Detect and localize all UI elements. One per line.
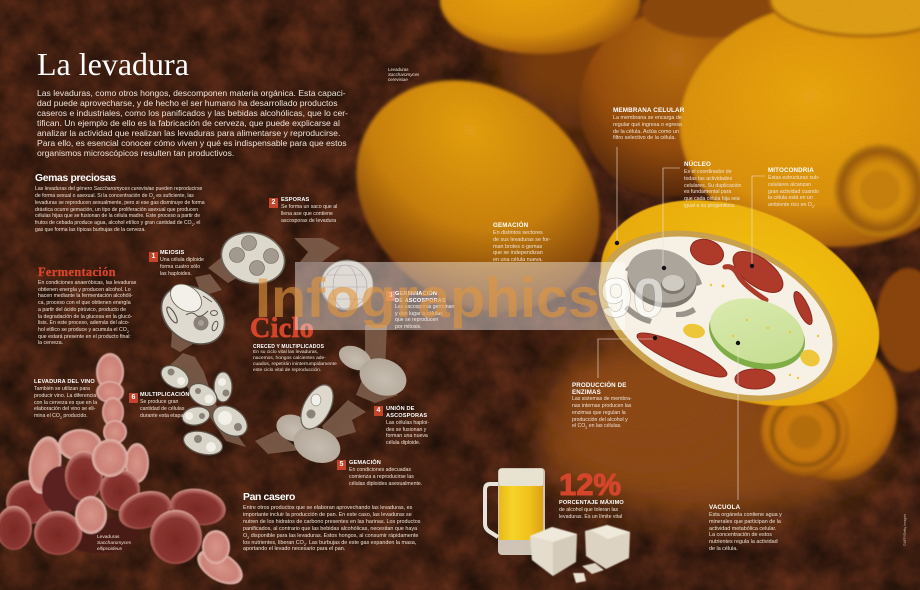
step 4 text: célula diploide. [386,440,420,446]
text: Fermentación: que estará presente en el producto final: [38,334,131,340]
text: Gemas preciosas: Las levaduras del género Saccharomyces cerevisiae pueden reproducirse [35,186,202,192]
cycle arrows [170,238,398,454]
label: Gemación: en una célula nueva. [493,257,543,263]
heading: Gemas preciosas: Gemas preciosas [35,173,116,184]
stat: 12%: 12% [559,467,621,502]
step 2 number: 2 [272,199,275,206]
label: Vacuola: nutrientes regula la actividad [709,539,778,545]
text: Levadura del vino: elaboración del vino se eli- [34,406,95,412]
step 2 text: Se forma un saco que al [281,204,337,210]
intro text: caseros e industriales, como los panificados y las bebidas alcohólicas, que lo cer- [37,108,348,118]
nucleus [621,242,703,324]
label: Producción de enzimas: producción del alcohol y [572,417,628,423]
step 2 text: ascosporas de levadura [281,218,336,224]
step 6 text: Se produce gran [140,399,178,405]
step 4 text: des se fusionan y [386,427,426,433]
text: Fermentación: ca, proceso con el que obtienen energía [38,300,131,306]
text: Gemas preciosas: de forma sexual o asexual. Si la concentración de O2 es suficiente, las [35,193,194,200]
heading: Pan casero: Pan casero [243,492,295,503]
caption: ellipsoideus: Levaduras [97,535,119,540]
label: Producción de enzimas: el CO2 en las células. [572,423,622,430]
photo: wine yeast Saccharomyces ellipsoideus [0,353,249,590]
step 3 text: Las ascosporas germinan [395,304,454,310]
step 6 text: cantidad de células [140,406,184,412]
outer yellow cell wall [569,160,911,446]
text: Pan casero: aportando el levado necesario para el pan. [243,546,345,552]
label: Producción de enzimas: enzimas que regulan la [572,410,626,416]
cells: step 6 multiplication [157,361,253,459]
label: Membrana celular: filtro selectivo de la célula. [613,135,676,141]
label: Mitocondria: la célula está en un [768,195,813,201]
label: Vacuola: minerales que participan de la [709,519,781,525]
step 4 text: Las células haploi- [386,420,429,426]
text: Pan casero: Entre otros productos que se elaboran aprovechando las levaduras, es [243,505,412,511]
caption: ellipsoideus [97,534,131,552]
cell: step 3 ascospores [321,260,373,310]
step 1 text: forma cuatro sólo [160,264,200,270]
step 4 text: ASCOSPORAS [386,413,427,419]
text: Levadura del vino: mina el CO2 producido. [34,413,88,420]
label: Gemación: que se independizan [493,250,543,256]
step 4 number: 4 [377,407,380,414]
label: Núcleo: celulares. Su duplicación [684,183,741,189]
label: Vacuola: actividad metabólica celular. [709,526,776,532]
text: Pan casero: nutren de los hidratos de carbono presentes en las harinas. Los productos [243,519,420,525]
caption: cerevisiae [388,67,420,82]
label: Núcleo [684,160,742,209]
cytoplasm [582,206,856,426]
text: Pan casero [243,505,420,552]
label: Membrana celular: La membrana se encarga de [613,115,682,121]
caption: cerevisiae: Levaduras [388,67,409,72]
text: Gemas preciosas: frutos de cebada produce agua, alcohol etílico y gran cantidad de CO2, el [35,220,200,227]
step 5 text: En condiciones adecuadas [349,467,411,473]
step 6 number [129,393,138,403]
intro text: Las levaduras, como otros hongos, descomponen materia orgánica. Esta capaci- [37,88,346,98]
watermark band [295,262,625,330]
text: Fermentación: la cerveza. [38,340,63,346]
caption: cerevisiae: cerevisiae [388,77,408,82]
label: Núcleo: Es el coordinador de [684,169,732,175]
watermark globe outline [323,265,367,309]
step 2 text: llena ase que contiene [281,211,333,217]
text: Gemas preciosas: levaduras se reproducen sexualmente, pero si ese gas disminuye de forma [35,200,205,206]
step 3 number [386,291,395,301]
caption: ellipsoideus: Saccharomyces [97,541,131,546]
text: Levadura del vino: con la cerveza es que en la [34,400,97,406]
label: Gemación [493,221,551,263]
intro text: analizar la actividad que realizan las levaduras para alimentarse y reproducirse. [37,128,340,138]
step 4 text [386,405,429,446]
label: Gemación: de sus levaduras se for- [493,237,551,243]
photo: budding yeast Saccharomyces cerevisiae [310,0,920,515]
step 1 text: MEIOSIS [160,250,184,256]
intro text: dad puede aprovecharse, y de hecho el ser humano ha desarrollado productos [37,98,338,108]
step 2 number [269,198,278,208]
text: Levadura del vino [34,379,98,420]
watermark word: 90 [600,266,665,329]
step 6 text: MULTIPLICACIÓN [140,392,190,398]
step 1 text: las haploides. [160,271,192,277]
label: Gemación: En distintos sectores [493,230,543,236]
step 4 text: UNIÓN DE [386,406,415,412]
step 5 number [337,460,346,470]
caption: ellipsoideus: ellipsoideus [97,547,122,552]
text: Pan casero: O2 disponible para las levaduras. Estos hongos, al consumir rápidamente [243,533,418,540]
step 3 text: que se reproducen [395,317,438,323]
text: Fermentación: obtienen energía y producen alcohol. Lo [38,287,131,293]
label: Vacuola: de la célula. [709,546,738,552]
step 4 number [374,406,383,416]
step 1 text [160,250,204,277]
step 2 text [281,197,337,224]
yeast cubes [530,525,630,583]
label: Membrana celular: de la célula. Actúa como un [613,129,679,135]
step 1 number [149,252,158,262]
label: Gemación: GEMACIÓN [493,222,528,229]
cell cutaway diagram [569,147,911,500]
step 3 text [395,290,454,330]
text: Ciclo: este ciclo vital de reproducción. [253,368,321,373]
text: Gemas preciosas: drástica ocurre gemación, un tipo de proliferación asexual que producen [35,207,198,213]
cell: step 4 fusion [335,341,412,402]
text: Gemas preciosas: células hijas que se fusionan de la célula madre. Este proceso a partir de [35,213,200,219]
label: Mitocondria: MITOCONDRIA [768,167,814,174]
text: Ciclo: En su ciclo vital las levaduras, [253,350,318,355]
step 3 text: por mitosis. [395,324,422,330]
membrane rim [573,198,863,434]
intro text: organismos microscópicos resulten tan productivos. [37,148,234,158]
leader dots [615,241,754,345]
label: Vacuola: VACUOLA [709,504,740,511]
text: Levadura del vino: producir vino. La diferencia [34,393,96,399]
step 5 number: 5 [340,461,343,468]
step 6 number: 6 [132,394,135,401]
text: Fermentación: hol etílico se produce y acumula el CO2 [38,327,129,334]
label: Producción de enzimas: PRODUCCIÓN DE [572,382,627,389]
label: Mitocondria [768,167,820,209]
photo credit: ©AFP/Getty Images [903,514,907,546]
intro text [37,88,348,158]
step 1 text: Una célula diploide [160,257,204,263]
label: Vacuola: Esta orgánela contiene agua y [709,512,782,518]
label: Producción de enzimas: nas internas producen las [572,403,631,409]
step 5 text: comienza a reproducirse las [349,474,414,480]
step 3 text: y dan lugar a células [395,311,443,317]
intro text: tifican. Un ejemplo de ello es la fabricación de cerveza, que puede explicarse al [37,118,340,128]
text: Ciclo: cuados, repetirán ininterrumpidamente [253,362,337,367]
step 5 text: células diploides asexualmente. [349,481,422,487]
label: Núcleo: todas las actividades [684,176,732,182]
cell: step 2 spores [216,226,290,290]
label: Membrana celular [613,107,684,141]
label: Mitocondria: ambiente rico en O2. [768,202,815,209]
label: Vacuola [709,504,782,552]
label: Membrana celular: MEMBRANA CELULAR [613,107,684,114]
label: Gemación: man brotes o gemas [493,244,542,250]
label: Producción de enzimas [572,381,632,430]
text: Gemas preciosas: gas que forma las típicas burbujas de la cerveza. [35,227,146,233]
step 1 number: 1 [152,253,155,260]
label: Mitocondria: Estas estructuras sub- [768,175,820,181]
label: Producción de enzimas: ENZIMAS [572,389,601,396]
label: Vacuola: La concentración de estos [709,532,772,538]
step 6 text [140,391,190,419]
leader lines [598,147,765,500]
text: Fermentación: En condiciones anaeróbicas, las levaduras [38,280,136,286]
label: Membrana celular: regular qué ingresa o egresa [613,122,682,128]
heading: Fermentación: Fermentación [38,265,116,279]
text: Ciclo [253,344,337,373]
stat caption: levaduras. Es un límite vital [559,514,622,520]
watermark word: Infographics [255,266,600,329]
cell: step 5 budding [273,380,345,469]
step 2 text: ESPORAS [281,197,309,203]
step 3 text: GERMINACIÓN [395,291,437,297]
stat caption: de alcohol que toleran las [559,507,618,513]
step 4 text: forman una nueva [386,433,428,439]
step 6 text: durante esta etapa. [140,413,185,419]
heading: Ciclo: Ciclo [250,313,314,344]
cycle diagram [150,226,412,469]
text: Pan casero: panificados, al contrario que las bebidas alcohólicas, necesitan que haya [243,526,417,532]
text: Ciclo: nacemos, hongos calcientes ade- [253,356,326,361]
beer mug [485,468,545,555]
text: Levadura del vino: También se utilizan para [34,386,90,392]
step 5 text: GEMACIÓN [349,460,381,466]
caption: cerevisiae: Saccharomyces [388,72,419,77]
text: Fermentación: la degradación de la glucosa en la glucó- [38,314,132,320]
yellow granules [682,284,822,379]
cell: step 1 meiosis [150,274,236,356]
text: Fermentación: hacen mediante la fermentación alcohóli- [38,293,133,299]
text: Fermentación: a partir del ácido pirúvico, producto de [38,307,126,313]
label: Núcleo: que cada célula hija sea [684,196,740,202]
label: Núcleo: NÚCLEO [684,161,711,168]
text: Fermentación [38,280,136,346]
stat caption: PORCENTAJE MÁXIMO [559,500,624,506]
label: Producción de enzimas: Las sistemas de membra- [572,396,632,402]
label: Mitocondria: gran actividad cuando [768,189,819,195]
text: Gemas preciosas [35,186,205,233]
intro text: Para ello, es esencial conocer cómo viven y qué es indispensable para que estos [37,138,347,148]
step 3 text: DE ASCOSPORAS [395,298,446,304]
text: Ciclo: CRECED Y MULTIPLICADOS [253,344,324,350]
label: Mitocondria: celulares alcanzan [768,182,811,188]
title: La levadura [37,46,189,82]
step 5 text [349,459,422,487]
stat caption [559,499,624,520]
text: Levadura del vino: LEVADURA DEL VINO [34,379,95,385]
step 3 number: 3 [389,292,392,299]
text: Pan casero: importante incluir la producción de pan. En este caso, las levaduras se [243,512,412,518]
mitochondria [633,235,816,389]
vacuole [701,288,813,380]
text: Fermentación: lisis. En este proceso, además del alco- [38,320,129,326]
label: Núcleo: es fundamental para [684,189,731,195]
label: Núcleo: igual a su progenitora. [684,203,735,209]
text: Pan casero: los nutrientes, liberan CO2. Las burbujas de este gas expanden la masa, [243,540,416,547]
